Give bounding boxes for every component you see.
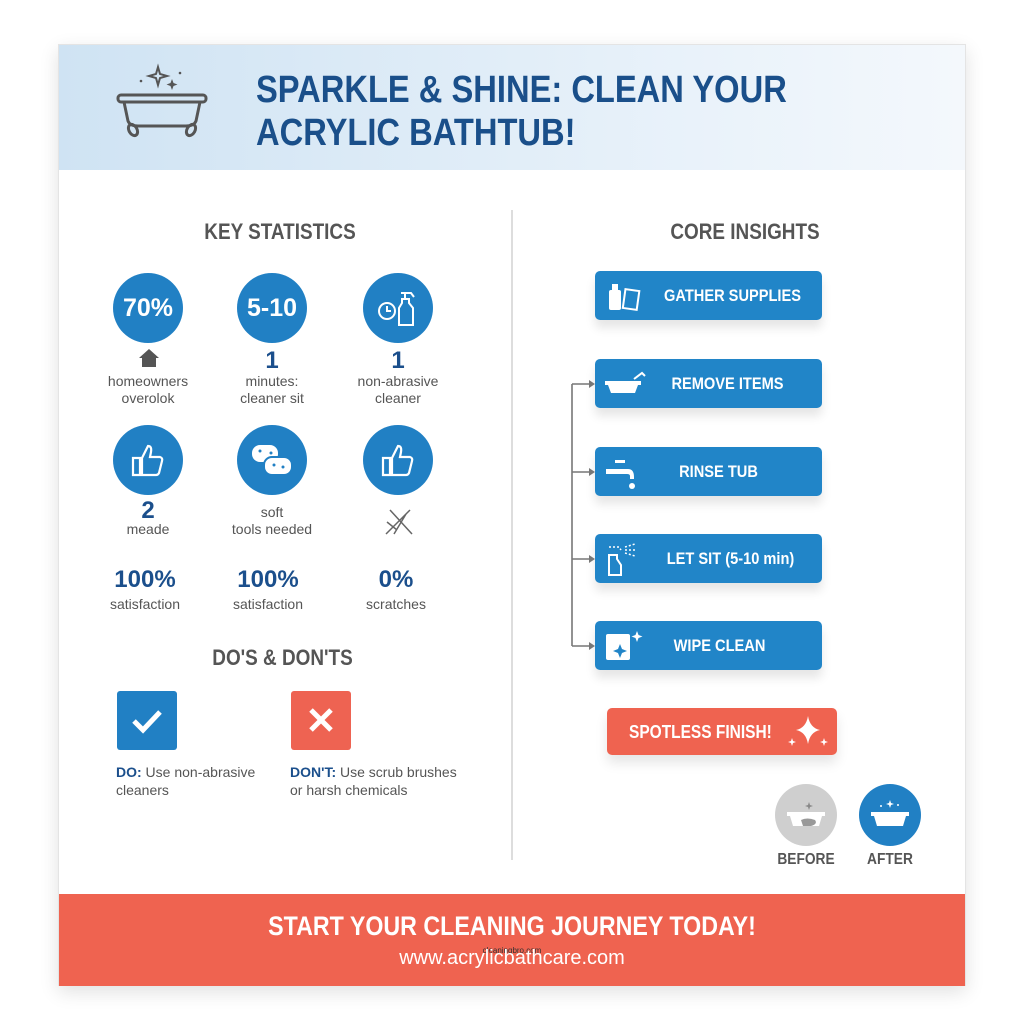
after icon xyxy=(859,784,921,868)
title: ACRYLIC BATHTUB! xyxy=(256,112,576,154)
watermark: cleaningbro.com xyxy=(483,946,541,955)
heading: core insights: CORE INSIGHTS xyxy=(670,219,820,244)
stats grid: satisfaction xyxy=(233,596,303,612)
stat: soft tools: tools needed xyxy=(232,521,312,537)
stat: 70%: 70% xyxy=(123,294,173,322)
step 5 xyxy=(595,621,822,670)
stat: thumbs 2: meade xyxy=(127,521,169,537)
stat: 70% xyxy=(108,273,188,406)
stat: non-abrasive: cleaner xyxy=(375,390,421,406)
title: SPARKLE & SHINE: CLEAN YOUR xyxy=(256,69,787,111)
stat: non-abrasive: non-abrasive xyxy=(358,373,438,389)
stat: 5-10: 1 xyxy=(265,347,279,374)
do block: DO: Use non-abrasive cleaners xyxy=(116,764,255,798)
flowchart xyxy=(571,271,920,826)
step 3 xyxy=(595,447,822,496)
before icon xyxy=(775,784,837,868)
step 5: WIPE CLEAN xyxy=(674,636,765,655)
stat: thumbs no scratch xyxy=(363,425,433,534)
stats grid: satisfaction xyxy=(110,596,180,612)
step 1 xyxy=(595,271,822,320)
step 2 xyxy=(595,359,822,408)
divider xyxy=(511,210,513,860)
stats grid: 0% xyxy=(379,566,413,593)
footer url: www.acrylicbathcare.com xyxy=(399,947,625,969)
spotless finish: SPOTLESS FINISH! xyxy=(629,722,772,742)
before icon: BEFORE xyxy=(777,851,835,868)
feedback loop arrows xyxy=(571,380,595,650)
stat: thumbs 2 xyxy=(113,425,183,537)
stat row: percentages: 100% xyxy=(114,566,176,593)
step 2: REMOVE ITEMS xyxy=(671,374,784,393)
dont block xyxy=(290,691,457,798)
step 4 xyxy=(595,534,822,583)
stat: 5-10: minutes: xyxy=(246,373,298,389)
icon: bathtub xyxy=(116,64,208,138)
step 3: RINSE TUB xyxy=(679,462,758,481)
stats grid: 100% xyxy=(237,566,299,593)
header band xyxy=(59,45,965,170)
footer banner xyxy=(59,894,965,986)
stat: 5-10: 5-10 xyxy=(247,294,297,322)
dont block: DON'T: Use scrub brushes or harsh chemicals xyxy=(290,764,457,798)
stat: 5-10 xyxy=(237,273,307,406)
stat: soft tools: soft xyxy=(261,504,283,520)
do block xyxy=(116,691,255,798)
spotless finish xyxy=(607,708,837,755)
stats grid xyxy=(108,273,438,612)
stats grid: scratches xyxy=(366,596,426,612)
stat: non-abrasive xyxy=(358,273,438,406)
step 1: GATHER SUPPLIES xyxy=(664,286,801,305)
footer headline: START YOUR CLEANING JOURNEY TODAY! xyxy=(268,911,756,941)
stat: 5-10: cleaner sit xyxy=(240,390,304,406)
step 4: LET SIT (5-10 min) xyxy=(667,549,794,568)
after icon: AFTER xyxy=(867,851,913,868)
stat: 70%: overolok xyxy=(122,390,174,406)
stat: non-abrasive: 1 xyxy=(391,347,405,374)
heading: dos and donts: DO'S & DON'TS xyxy=(212,645,353,670)
stat: thumbs 2: 2 xyxy=(141,497,155,524)
stat: 70%: homeowners xyxy=(108,373,188,389)
heading: key statistics: KEY STATISTICS xyxy=(204,219,356,244)
title xyxy=(256,69,787,154)
stat: soft tools xyxy=(232,425,312,537)
